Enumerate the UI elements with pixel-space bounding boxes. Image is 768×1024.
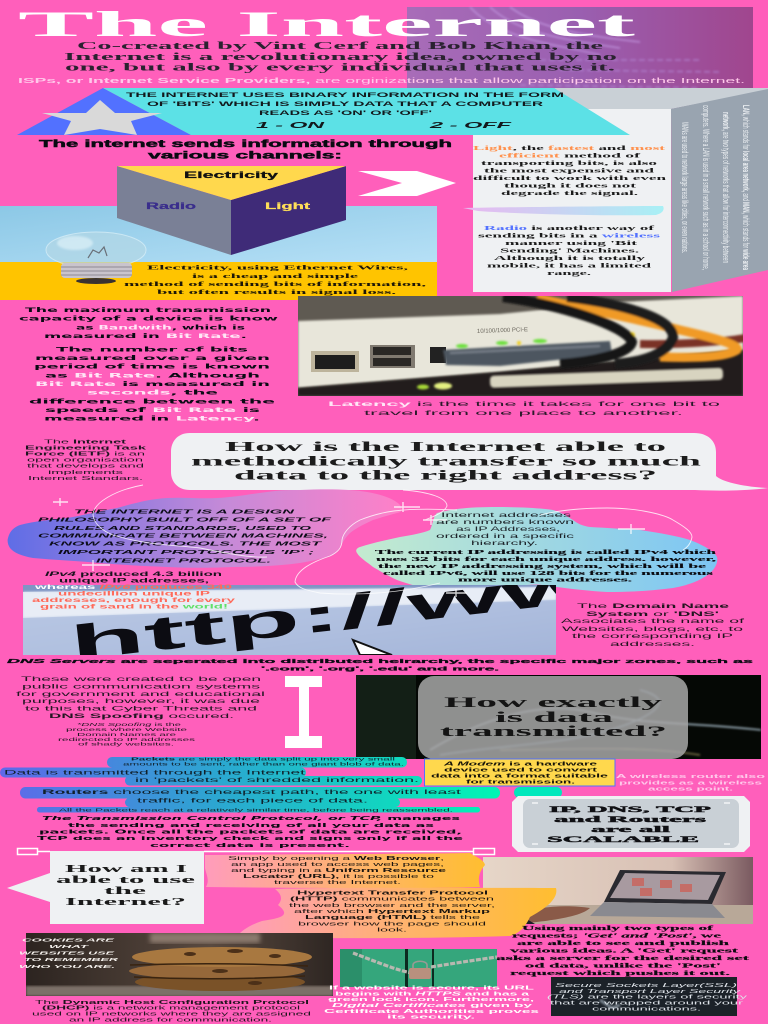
subtitle: one, but also by every individual that uses it. (65, 62, 616, 74)
side panel text: LAN, which stands for local area network, and MAN, which stands for wide area (740, 105, 751, 270)
text: open public systems: These were created to be open (21, 676, 263, 683)
text: HTTPS security: Digital Certificates given by (332, 1003, 532, 1009)
text: packets: amounts to be sent, rather than one giant blob of data. (123, 762, 404, 766)
text: DNS spoofing note: redirected to IP addresses (58, 737, 197, 742)
text: DNS definition: The Domain Name (577, 603, 731, 610)
text: IPv4 and IPv6 (32, 571, 236, 610)
text: DNS servers (7, 659, 753, 672)
text: radio: mobile, it has a limited (487, 262, 653, 270)
photo: laptop (483, 857, 753, 924)
text: DNS servers: DNS Servers are seperated into distributed heirarchy, the specific major zones, such as (7, 659, 753, 665)
banner text: THE INTERNET USES BINARY INFORMATION IN THE FORM (126, 93, 564, 99)
callout: modem (424, 759, 615, 786)
text: bit rate: as Bit Rate . Although (45, 371, 261, 379)
text: get and post: od data, unlike the 'Post' (525, 962, 722, 970)
frame ends (18, 848, 494, 854)
text: get and post: are able to see and publish (517, 940, 730, 947)
text: DHCP: (DHCP) is a network management protocol (42, 1006, 300, 1012)
text: HTTPS security: its security. (387, 1014, 477, 1020)
callout: scalable: and Routers (554, 814, 708, 824)
text: latency: travel from one place to another. (364, 410, 683, 417)
blob: internet addresses (356, 507, 718, 593)
text: web browser: Simply by opening a Web Browser , (228, 856, 444, 862)
text: HTTP: browser how the page should (298, 921, 486, 927)
text: bit rate: The number of bits (56, 345, 248, 353)
photo: http address bar (23, 585, 556, 655)
panel: SSL and TLS (547, 977, 748, 1016)
text: routers: Routers choose the cheapest path, the one with least (42, 789, 462, 796)
blob: internet addresses: as IP Addresses, (456, 527, 561, 533)
text: routers (42, 789, 462, 804)
side panel text (679, 105, 751, 270)
text: cookies: COOKIES ARE (22, 938, 116, 944)
text: light: degrade the signal. (501, 190, 639, 197)
text: light (473, 145, 668, 197)
text: TCP: packets. Once all the packets of data are received, (39, 830, 462, 836)
text: IETF: open organisation (27, 458, 144, 464)
text: bandwidth (19, 306, 278, 340)
text: DNS spoofing note: of shady websites. (78, 742, 174, 746)
text: routers: traffic, for each piece of data. (137, 798, 369, 804)
text: DHCP: used on IP networks where they are assigned (32, 1012, 311, 1018)
text: open public systems: to this that Cyber Threats and (25, 706, 259, 712)
callout: scalable: SCALABLE (547, 834, 699, 844)
text: wireless router: access point. (648, 786, 734, 792)
text: electricity (124, 264, 427, 296)
text: TCP: The Transmission Control Protocol, or TCP, manages (42, 816, 462, 822)
text: bit rate: measured in Latency . (44, 415, 260, 423)
light blue bulb panel (0, 206, 437, 300)
blob: design philosophy: RULES AND STANDARDS, USED TO (54, 526, 313, 532)
text: electricity: but often results in signal loss. (157, 289, 397, 296)
subtitle: Co-created by Vint Cerf and Bob Khan, the (77, 41, 605, 52)
text: TCP: the sending and receiving of all your data as (68, 823, 436, 829)
text: DNS spoofing note: process where Website (66, 727, 188, 732)
text: IETF: Internet Standars. (28, 476, 143, 482)
text: IPv4 and IPv6: whereas IPv6 produces 340 (33, 584, 233, 591)
3D box: network types: computers. Where a LAN is used in a small network such as in a school or home, (700, 105, 711, 270)
text: get and post: Using mainly two types of (522, 925, 715, 932)
text: HTTP: Hypertext Transfer Protocol (297, 890, 490, 896)
panel: how exactly is data transmitted: transmitted? (440, 724, 667, 740)
text: TCP: correct data is present. (150, 843, 350, 849)
text: radio (478, 225, 662, 277)
cube diagram: three channels: Electricity (184, 170, 278, 180)
text: IETF: that develops and (27, 464, 145, 470)
panel: SSL and TLS: that are wrapped around your (550, 1000, 744, 1006)
text: HTTP: (HTTP) communicates between (290, 897, 494, 903)
callout: modem: for transmission. (466, 780, 576, 786)
banner text (126, 93, 564, 130)
text: DHCP (32, 1000, 311, 1024)
text: cookies (19, 938, 119, 970)
text: cookies: WHAT (49, 944, 91, 950)
cube diagram: three channels: Radio (146, 201, 197, 211)
text: bit rate: speeds of Bit Rate is (45, 406, 260, 414)
panel: SSL and TLS: Secure Sockets Layer(SSL) (555, 983, 738, 989)
text: HTTP (289, 890, 495, 934)
text: open public systems: public communication systems (22, 684, 260, 690)
photo: green door with padlock (340, 949, 497, 987)
text: HTTPS security: If a website is secure, its URL (329, 986, 536, 992)
banner text: 1 - ON (256, 120, 326, 130)
text: bandwidth: capacity of a device is know (19, 315, 278, 323)
text: electricity: Electricity, using Ethernet Wires, (147, 264, 409, 272)
speech bubble: how is the internet: data to the right address? (234, 468, 657, 482)
text: radio: Radio is another way of (484, 225, 657, 232)
text: cookies: WHO YOU ARE. (19, 964, 115, 970)
panel: how exactly is data transmitted (356, 675, 761, 759)
text: bit rate: measured over a given (35, 354, 271, 362)
ISP note: ISPs, or Internet Service Providers, are orginizations that allow participation on the Internet. (18, 78, 745, 85)
text: bit rate (29, 345, 277, 423)
text: light: transporting bits, is also (481, 160, 657, 167)
text: wireless router: provides as a wireless (619, 780, 762, 786)
text: packets: Packets are simply the data split up into very small (131, 756, 395, 762)
cube diagram: three channels: Light (265, 201, 310, 211)
text: IETF: Force (IETF) is an (25, 451, 146, 457)
text: DNS spoofing note (58, 722, 197, 746)
callout: modem: data into a format suitable (431, 774, 608, 780)
text: IPv4 and IPv6: undecillion unique IP (58, 590, 210, 598)
blob: internet addresses: are numbers known (436, 520, 574, 526)
title: The Internet (18, 4, 635, 44)
text: bandwidth: measured in Bit Rate . (44, 332, 247, 340)
brush stroke panel (205, 853, 556, 938)
text: HTTPS security: Certificate Authorities proves (324, 1009, 539, 1015)
blob: internet addresses: The current IP addressing is called IPv4 which (375, 550, 718, 556)
text: DNS spoofing note: *DNS Spoofing is the (77, 722, 182, 727)
blob: internet addresses: the new IP addressing system, which will be (378, 564, 707, 570)
arrow (358, 171, 456, 196)
text: open public systems: purposes, however, it was due (22, 698, 262, 705)
text: HTTP: after which Hypertext Markup (294, 909, 490, 915)
text: web browser (228, 856, 446, 886)
text: get and post: asks a server for the desired set (496, 955, 752, 962)
text: latency: Latency is the time it takes for one bit to (328, 401, 721, 408)
text: get and post: various ideas. A 'Get' request (510, 948, 740, 955)
subtitle (64, 41, 617, 74)
text: DNS servers: '.com', '.org', '.edu' and more. (261, 666, 500, 672)
blob: internet addresses: Internet addresses (441, 513, 571, 519)
callout: scalable (512, 796, 750, 852)
text: DNS definition: the corresponding IP (572, 633, 733, 640)
text: web browser: an app used to access web pages, (231, 862, 444, 868)
text: bandwidth: The maximum transmission (25, 306, 272, 314)
speech bubble: how is the internet: How is the Internet able to (225, 439, 667, 454)
blob: internet addresses: hierarchy. (471, 541, 539, 547)
text: DNS spoofing note: Domain Names are (77, 732, 177, 737)
callout: how am I able to use the internet: able to use (56, 874, 195, 886)
side panel text: network, are two types of networks that allow for interconnectivity between (720, 112, 731, 263)
text: light: though it does not (504, 182, 639, 190)
text: IPv4 and IPv6: grain of sand in the world! (40, 604, 228, 610)
text: cookies: WEBSITES USE (19, 950, 116, 956)
banner: binary information (17, 88, 630, 135)
text: DNS definition: Associates the name of (561, 618, 745, 625)
text: radio: Sending' Machines. (500, 248, 640, 254)
text: bandwidth: as Bandwith , which is (76, 323, 245, 331)
text: latency (328, 401, 721, 417)
panel: SSL and TLS: (TLS) are the layers of security (547, 994, 748, 1000)
icon: light bulb (46, 232, 146, 284)
blob: design philosophy: THE INTERNET IS A DESIGN (74, 509, 297, 515)
blob: design philosophy: COMMUNICATE BETWEEN MACHINES, (38, 534, 329, 540)
icon: I-beam (285, 676, 322, 748)
blob: design philosophy (8, 489, 402, 568)
blob: internet addresses: called IPv6, will use 128 bits for the numerous (383, 571, 715, 577)
text: radio: sending bits in a wireless (478, 232, 662, 240)
blob: design philosophy: KNOW AS PROTOCOLS. THE MOST (49, 542, 323, 548)
blob: design philosophy: IMPORTANT PROTOCOL IS 'IP' ; (58, 550, 314, 556)
text: TCP: TCP does an inventory check and signs only if all the (37, 836, 464, 842)
text: IPv4 and IPv6: addresses, enough for every (32, 597, 236, 604)
text: bit rate: seconds , the (87, 389, 220, 397)
text: light: Light , the fastest and most (473, 145, 668, 152)
cube diagram: three channels (117, 166, 346, 255)
panel: SSL and TLS: and Transport Layer Security (559, 989, 741, 995)
banner text: 2 - OFF (427, 120, 513, 130)
callout: modem: device used to convert (444, 768, 598, 774)
text: light: the most expensive and (484, 168, 656, 174)
blob: design philosophy: PHILOSOPHY BUILT OFF OF A SET OF (38, 518, 333, 524)
photo: http address bar: http://ww (67, 558, 602, 671)
text: DNS definition: System or 'DNS' (586, 611, 720, 618)
text: HTTPS security (324, 986, 539, 1020)
text: HTTP: the web browser and the server, (289, 903, 495, 909)
text: packets (123, 756, 404, 766)
callout: how am I able to use the internet: How am I (65, 863, 187, 875)
panel: how exactly is data transmitted: is data (495, 710, 615, 726)
text: HTTP: Language (HTML) tells the (305, 915, 480, 921)
callout: scalable: IP, DNS, TCP (549, 804, 713, 814)
panel: how exactly is data transmitted: How exactly (444, 695, 664, 711)
text: radio: manner using 'Bit (505, 240, 640, 247)
blob: design philosophy: INTERNET PROTOCOL. (96, 558, 272, 564)
text: bit rate: Bit Rate is measured in (35, 380, 271, 388)
text: radio: range. (547, 270, 592, 277)
callout: modem: A Modem is a hardware (441, 762, 597, 768)
text: open public systems (16, 676, 265, 720)
callout: how am I able to use the internet: the (104, 885, 146, 897)
text: web browser: traverse the Internet. (274, 880, 401, 886)
text: wireless router: A wireless router also (616, 774, 766, 780)
speech bubble: how is the internet (171, 433, 768, 491)
photo: cookies (19, 933, 333, 996)
text: radio: Although it is totally (494, 255, 648, 262)
photo: router with cables: 10/100/1000 PCI-E (477, 327, 528, 335)
text: IPv4 and IPv6: IPv4 produced 4.3 billion (45, 571, 223, 578)
photo: router with cables (298, 296, 745, 396)
heading: channels: various channels: (148, 150, 342, 162)
3D box: network types (473, 88, 768, 292)
text: IPv4 and IPv6: unique IP addresses, (59, 578, 210, 584)
text: electricity: method of sending bits of information, (124, 281, 427, 288)
text: web browser: and typing in a Uniform Resource (231, 868, 446, 874)
text: get and post (496, 925, 752, 977)
text: light: difficult to work with even (473, 175, 668, 182)
text: open public systems: for government and educational (16, 691, 265, 698)
text: IETF (25, 439, 147, 482)
text: HTTP: look. (377, 928, 407, 934)
text: light: efficient method of (499, 152, 643, 160)
text: DNS definition: addresses. (610, 641, 696, 648)
side panel text: WANs are used to network large areas like cities, or even nations. (679, 122, 690, 253)
text: DHCP: The Dynamic Host Configuration Protocol (35, 1000, 310, 1006)
text: DHCP: an IP address for communication. (69, 1018, 272, 1024)
text: DNS definition (561, 603, 745, 648)
text: get and post: request which pushes it out. (510, 970, 731, 977)
text: bit rate: difference between the (29, 397, 277, 405)
text: cookies: TO REMEMBER (24, 957, 119, 963)
panel: SSL and TLS: communications. (592, 1006, 701, 1012)
subtitle: Internet is a revolutionary idea, owned by no (64, 52, 617, 63)
brush stroke divider (463, 206, 664, 215)
text: data transmitted: in 'packets' of shredded information. (135, 777, 420, 784)
decorative outlines (53, 485, 692, 597)
text: bit rate: period of time is known (34, 363, 271, 371)
text: web browser: Locator (URL), it is possible to (243, 874, 434, 880)
banner text: READS AS 'ON' OR 'OFF' (259, 111, 433, 117)
icon: star (42, 100, 162, 135)
callout: how am I able to use the internet: Internet? (65, 896, 186, 908)
speech bubble: how is the internet: methodically transfer so much (191, 453, 702, 468)
text: DNS definition: Websites, blogs, etc. to (562, 626, 745, 633)
callout: how am I able to use the internet (7, 851, 204, 924)
text: TCP (37, 816, 464, 849)
text: HTTPS security: green lock icon. Furthermore, (328, 997, 536, 1003)
blob: internet addresses: uses 32 bits for each unique address. however, (376, 557, 717, 563)
text: data transmitted: Data is transmitted through the Internet (4, 770, 306, 776)
heading: channels (39, 138, 452, 162)
text: reassembled: All the Packets reach at a relatively similar time, before being reassembled. (59, 808, 453, 812)
header image: network cables (407, 7, 753, 113)
text: IETF: Engineering Task (25, 445, 147, 451)
text: data transmitted (4, 770, 420, 784)
text: IETF: implements (48, 470, 124, 476)
text: open public systems: DNS Spoofing occured. (49, 713, 235, 720)
blob: internet addresses: more unique addresses. (458, 578, 633, 584)
heading: channels: The internet sends information through (39, 138, 452, 150)
text: IETF: The Internet (44, 439, 127, 445)
text: HTTPS security: begins with HTTPS and has a (335, 991, 529, 997)
blob: internet addresses: ordered in a specific (436, 534, 574, 540)
text: electricity: is a cheap and simple (192, 273, 359, 280)
callout: scalable: are all (591, 824, 672, 834)
text: wireless router (616, 774, 766, 792)
banner text: OF 'BITS' WHICH IS SIMPLY DATA THAT A COMPUTER (147, 102, 545, 108)
text: get and post: requests; 'Get' and 'Post' , we (512, 932, 721, 940)
gradient strips: packets (0, 756, 562, 812)
